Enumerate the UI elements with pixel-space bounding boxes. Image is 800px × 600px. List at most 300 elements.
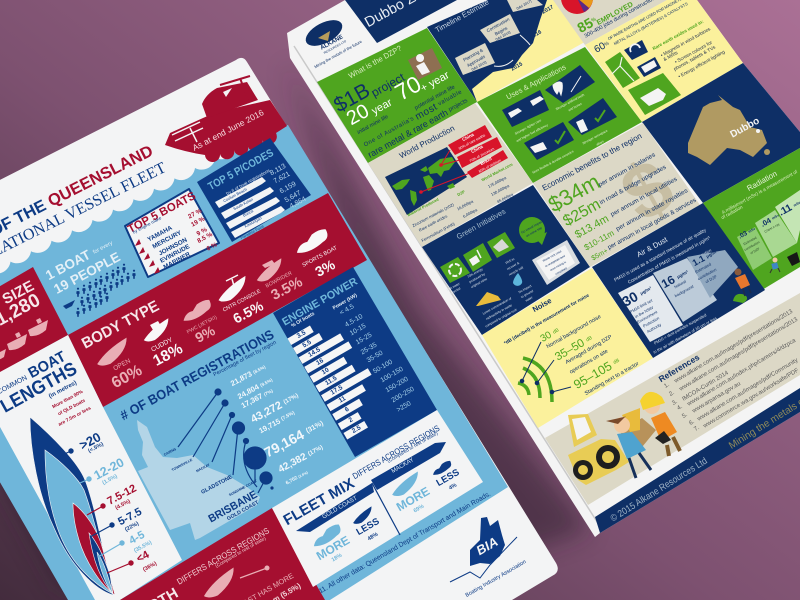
panel: green initiatives: Green Initiatives: [455, 207, 507, 241]
panel: top 5 postcodes: 5,647: [284, 190, 302, 204]
icon: motor cruiser: As at end June 2016: [191, 107, 266, 153]
panel: noise: *dB (decibel) is the measurement for noise: [503, 292, 591, 346]
logo: alkane: [302, 15, 363, 69]
panel: timeline estimate: 2016: [529, 29, 543, 41]
panel: air and dust: 16 μg/m³: [659, 265, 691, 291]
panel: air and dust: PM10 is used as a standard measure of air quality: [613, 227, 707, 282]
panel: air and dust: [592, 203, 765, 358]
panel: mining references: 7.: [693, 425, 701, 433]
panel: green initiatives: 70% water: [445, 281, 461, 292]
map city labels: GLADSTONE: [200, 474, 234, 496]
panel: top 5 boats: YAMAHA: [146, 224, 174, 243]
panel: common boat lengths: are 7.5m or less: [57, 405, 92, 428]
logo: boating industry association: [450, 517, 527, 599]
panel: length differs across regions: [120, 508, 325, 600]
chart: power ranges: 15-25: [355, 332, 373, 346]
panel: top 5 boats: JOHNSON: [158, 236, 189, 257]
table: production: DZP: [456, 189, 466, 197]
panel: fleet mix: LESS: [355, 516, 381, 538]
illustration: loader and miners: [568, 392, 680, 485]
panel: body type: 3.5%: [269, 274, 305, 304]
chart: bar values: 17.5: [330, 384, 344, 397]
chart labels: length categories: (22%): [124, 521, 140, 533]
panel: mining references: 5.: [681, 412, 689, 420]
panel: employment pie: EMPLOYED: [595, 0, 634, 27]
chart: bar values: 11.5: [324, 375, 339, 387]
panel: air and dust: PM10 limit set: [629, 297, 654, 314]
panel: top 5 boats: EVINRUDE: [159, 243, 191, 265]
panel: timeline estimate: Planning &: [462, 48, 484, 62]
panel: green initiatives: completed: [554, 266, 568, 276]
panel: employment pie: 85%: [574, 12, 600, 36]
table: production: Material Produced: [407, 196, 440, 217]
logo: alkane: ALKANE: [320, 34, 344, 52]
map connectors: [178, 389, 273, 493]
panel: top 5 postcodes: [197, 138, 311, 242]
world production callouts: [419, 125, 508, 194]
table: production: Zirconium materials (zr02): [411, 202, 455, 228]
panel: radiation: Estimated: [743, 236, 758, 246]
panel: common boat lengths: BOAT: [25, 348, 69, 382]
chart: bar values: 11: [338, 395, 347, 405]
table: production: Rare earth oxides: [418, 213, 448, 233]
panel: air and dust: contribution: [697, 267, 717, 281]
panel: green initiatives: to ground: [520, 289, 534, 299]
map city labels: TOWNSVILLE: [171, 458, 194, 472]
chart labels: length categories: (1.5%): [101, 473, 119, 486]
panel: radiation: Chest x-ray: [764, 222, 781, 234]
panel: body type: CNTR CONSOLE: [222, 288, 262, 314]
panel: noise: 30 dB: [539, 325, 562, 345]
panel: air and dust: PM10 = dust particles suspended: [653, 312, 707, 346]
panel: top 5 postcodes: South Kolan: [232, 197, 254, 211]
chart: bar values: [296, 329, 363, 435]
panel: fleet mix: 69%: [413, 504, 425, 514]
panel: rare earths uses: [585, 0, 743, 122]
world production callouts: 85% of niobium: [478, 158, 502, 174]
chart: power ranges: >250: [396, 400, 413, 414]
panel: body type: 9%: [192, 322, 218, 346]
panel: body type: [68, 193, 367, 407]
panel: rare earths uses: • Energy efficient lighting: [677, 49, 726, 80]
map city labels: SUNSHINE COAST: [228, 478, 259, 497]
panel: mining references: www.alkane.com.au/images/pdf/presentations/2013: [673, 308, 795, 385]
chart labels: length categories: 12-20: [92, 455, 126, 483]
panel: radiation: A millisievert (mSv) is a measurement of: [721, 169, 799, 216]
panel: fleet mix: DIFFERS ACROSS REGIONS: [351, 423, 442, 481]
table: production: 16,000tpa: [456, 198, 475, 211]
panel: what is the dzp: $1B: [330, 79, 374, 117]
panel: fleet mix: LESS: [435, 467, 461, 489]
panel: noise: 35–50 dB: [553, 332, 595, 364]
world production callouts: 70% of zirconium: [469, 147, 495, 163]
panel: green initiatives: on mine site: [525, 226, 543, 238]
panel: mining references: www.alkane.com.au/index.php/careers/4/dzpca: [686, 338, 798, 408]
panel: mining references: 6.: [688, 419, 696, 427]
panel: length differs across regions: (Compared to rest of state): [214, 535, 267, 569]
panel: green initiatives: original mine: [470, 277, 488, 289]
chart labels: length categories: (35.5%): [133, 540, 153, 554]
panel: economic benefits: per annum in local goods & services: [607, 197, 697, 251]
panel: body type: 18%: [150, 340, 186, 370]
world production callouts: China: [461, 132, 475, 142]
footer band: © 2015 Alkane Resources Ltd: [609, 456, 709, 524]
panel: rare earths uses: • Magnets in wind turbines: [660, 26, 712, 59]
table: production: 175,000tpa: [487, 175, 508, 189]
chart: power ranges: 25-35: [360, 342, 378, 356]
chart: bar values: 6: [344, 406, 351, 414]
chart: engine power bars: [287, 325, 372, 439]
world production callouts: Brazil: [479, 156, 493, 166]
shadows: [0, 60, 590, 590]
table: production: 130,000tpa: [490, 183, 511, 197]
panel: top 5 postcodes: Bucca: [242, 208, 255, 218]
panel: fleet mix: [272, 410, 483, 587]
panel: radiation: contribution: [744, 240, 761, 252]
heading: one boat per people: 19 PEOPLE: [51, 249, 123, 297]
chart: bar values: 2.5: [351, 424, 363, 435]
panel: green initiatives: 70% energy: [467, 267, 484, 279]
table: production: 6,000tpa: [462, 207, 479, 219]
panel: green initiatives: No visual impact: [520, 219, 544, 235]
panel: air and dust: Concentration of PM10 is measured in μg/m³: [627, 235, 711, 285]
panel: green initiatives: compared to original rock: [484, 307, 518, 328]
region registration figures: 6,702 (2.6%): [285, 470, 309, 486]
panel: what is the dzp: 70: [391, 70, 425, 106]
chart: bar values: 5.5: [301, 339, 313, 349]
panel: top 5 boats: 8.5 %: [196, 231, 214, 245]
panel: green initiatives: produced by: [468, 272, 486, 284]
panel: noise: Averaged during DZP: [565, 334, 614, 366]
panel: world production: World Production: [398, 124, 456, 160]
table: production: [407, 161, 515, 243]
panel: world production: [368, 103, 533, 247]
panel: green initiatives: No impact: [518, 284, 532, 294]
map: world: [385, 147, 467, 215]
chart: power ranges: 150-200: [384, 376, 410, 394]
panel: green initiatives: to revegetate land: [544, 254, 566, 268]
chart: power ranges: [339, 303, 416, 414]
panel: green initiatives: [422, 185, 590, 335]
panel: rare earths uses: & MRIs: [662, 50, 680, 63]
panel: engine power: [273, 267, 437, 457]
panel: mining references: www.alkane.com.au/images/pdf/Community: [696, 357, 799, 423]
panel: economic benefits: $25m: [560, 196, 604, 230]
panel: noise: Noise: [531, 296, 553, 314]
panel: economic benefits: in road & bridge upgrades: [599, 164, 667, 206]
panel: noise: Standing next to a tractor: [584, 361, 640, 397]
panel: fleet mix: MORE: [314, 533, 352, 563]
world production callouts: China: [470, 144, 484, 154]
panel: mining references: www.alkane.com.au/images/pdf/presentations/2013: [678, 316, 800, 393]
panel: rare earths uses: 60%: [593, 38, 612, 56]
panel: mining references: www.arpansa.gov.au: [691, 381, 742, 415]
panel: top 5 boats: MERCURY: [151, 229, 183, 251]
panel: economic benefits: $34m: [544, 169, 604, 217]
panel: top 5 boats: TOP 5 BOATS: [126, 190, 198, 236]
icon: motor cruiser: [165, 76, 287, 162]
panel: mining references: 3.: [671, 399, 679, 407]
chart: nested sail shapes: [30, 417, 115, 595]
panel: air and dust: Natural: [673, 279, 687, 289]
heading: one boat per people: 1 BOAT: [43, 247, 94, 283]
panel: green initiatives: once mining is: [549, 260, 567, 272]
panel: mining references: 1.: [663, 382, 671, 390]
panel: radiation: .03 mSv: [737, 225, 757, 240]
chart: bar values: 3.5: [296, 329, 307, 340]
panel: rare earths uses: METAL ALLOYS (BATTERIES) & CATALYSTS: [613, 1, 689, 46]
panel: green initiatives: recycled: [449, 286, 461, 296]
panel: mining references: References: [657, 352, 701, 384]
left page: queensland recreational vessel fleet: [0, 58, 558, 600]
panel: top 5 postcodes: Coolum Beach: [222, 187, 248, 203]
chart: power ranges: 200-250: [390, 386, 416, 404]
panel: top 5 postcodes: 7,621: [273, 171, 291, 185]
logo: boating industry association: Boating Industry Association: [465, 559, 527, 599]
panel: rare earths uses: Rare earth oxides used in:: [652, 19, 705, 51]
chart labels: length categories: [77, 429, 158, 573]
panel: top 5 boats: 6 %: [206, 241, 219, 253]
panel: uses and applications: and higher fuel efficiency: [516, 123, 549, 143]
panel: engine power: ENGINE POWER: [280, 276, 360, 328]
panel: timeline estimate: [427, 0, 667, 102]
panel: dubbo location map: [642, 63, 800, 203]
panel: what is the dzp: potential mine life: [414, 84, 456, 112]
panel: what is the dzp: rare metal & rare earth projects: [366, 96, 470, 160]
map: queensland: [137, 420, 260, 540]
panel: radiation: Radiation: [745, 169, 779, 193]
panel: number of boat registrations: Percentage of fleet by region: [213, 340, 277, 378]
region registration figures: 19,715 (7.5%): [257, 409, 297, 435]
panel: economic benefits: $5m+: [591, 248, 609, 262]
panel: body type: BOWRIDER: [265, 270, 293, 289]
panel: mining references: www.commerce.wa.gov.au/worksafe/PDF: [702, 367, 800, 430]
panel: green initiatives: recycle salt: [508, 265, 524, 277]
region registration figures: 24,804 (9.5%): [236, 375, 274, 401]
panel: green initiatives: radioactivity in waste: [485, 303, 513, 321]
logo: alkane: RESOURCES LTD: [323, 39, 348, 55]
panel: top 5 postcodes: 4,864: [289, 196, 307, 210]
panel: uses and applications: alloys: [595, 139, 605, 147]
page sheet: [0, 58, 558, 600]
panel: engine power: % Of boats: [290, 311, 316, 329]
title banner: [345, 0, 457, 43]
panel: air and dust: Environment: [636, 309, 659, 325]
panel: what is the dzp: year: [370, 96, 395, 117]
chart: bar values: 14.5: [307, 346, 322, 359]
chart connectors: [60, 451, 131, 573]
panel: green initiatives: water: [525, 295, 534, 303]
panel: number of boat registrations: # OF BOAT REGISTRATIONS: [118, 327, 276, 423]
chart labels: length categories: (<.5%): [87, 441, 105, 454]
panel: body type: OPEN: [112, 357, 132, 372]
table: production: World Market.com: [481, 161, 514, 182]
panel: uses and applications: Uses & Applications: [505, 62, 568, 102]
panel: air and dust: 1.1 μg/m³: [691, 246, 720, 268]
panel: number of boat registrations: [118, 327, 327, 540]
table: production: 95,000tpa: [496, 191, 515, 204]
panel: body type: SPORTS BOAT: [302, 245, 339, 269]
panel: economic benefits: per annum in state royalties: [615, 187, 689, 233]
panel: air and dust: 30 μg/m³: [619, 280, 655, 310]
panel: common boat lengths: (in metres): [48, 380, 78, 400]
chart: power ranges: 35-50: [366, 350, 384, 364]
panel: top 5 postcodes: by # of boat registrations: [225, 168, 271, 196]
chart labels: length categories: 4-5: [127, 529, 147, 547]
panel: timeline estimate: (Mid 2015): [471, 60, 487, 72]
panel: mining references: 2.: [668, 390, 676, 398]
icon: sound waves: [518, 358, 552, 402]
chart: power ranges: 4.5-10: [344, 313, 364, 329]
panel: air and dust: in the air with diameters of 10 μm or less: [652, 315, 718, 355]
panel: uses and applications: [477, 47, 642, 183]
panel: body type: 60%: [109, 362, 145, 392]
panel: top 5 boats: 9 %: [196, 226, 209, 238]
heading: one boat per people: for every: [92, 240, 114, 256]
panel: noise: operations on site: [569, 349, 609, 375]
region registration figures: 21,873 (8.5%): [229, 362, 267, 388]
scalloped light blue background: [0, 125, 508, 600]
panel: mining references: [545, 293, 800, 505]
panel: top 5 boats: 27 %: [187, 207, 203, 220]
panel: body type: CUDDY: [150, 336, 174, 354]
panel: common boat lengths: More than 90%: [51, 389, 85, 410]
panel: top 5 boats: 19 %: [190, 215, 206, 228]
panel: economic benefits: [533, 123, 700, 267]
panel: green initiatives: Waste rock used: [542, 249, 562, 263]
chart labels: length categories: (4.5%): [114, 498, 132, 511]
region registration figures: 42,382 (17%): [277, 443, 325, 475]
panel: what is the dzp: One of Australia's most valuable: [362, 87, 465, 151]
panel: uses and applications: Stronger aerospace: [582, 129, 608, 145]
panel: fleet mix: GOLD COAST: [321, 495, 359, 520]
panel: air and dust: Protection: [642, 315, 660, 329]
panel: uses and applications: Stronger artificial teeth: [555, 93, 585, 111]
panel: what is the dzp: + year: [419, 69, 452, 95]
panel: body type: PWC (JETSKI): [186, 314, 218, 335]
panel: what is the dzp: [317, 28, 477, 163]
panel: noise: [482, 268, 653, 428]
chart: power ranges: 100-150: [379, 366, 405, 384]
panel: economic benefits: Economic benefits to the region: [541, 131, 643, 193]
panel: timeline estimate: Approvals: [466, 54, 487, 68]
panel: top 5 boats: by engine make: [132, 215, 163, 235]
panel: uses and applications: Stronger, lighter cars: [514, 118, 542, 136]
chart: bar values: 10: [321, 366, 331, 376]
panel: rare earths uses: phones, tablets & TVs: [673, 44, 717, 73]
panel: common boat lengths: [0, 335, 182, 600]
chart labels: length categories: 5-7.5: [116, 506, 144, 528]
panel: uses and applications: More flexible & durable ceramics: [532, 149, 575, 175]
panel: radiation: .04 mSv: [759, 211, 781, 229]
panel: fleet mix: MACKAY: [391, 457, 415, 475]
panel: top 5 boats: [125, 189, 219, 277]
panel: fleet mix: 48%: [367, 532, 379, 542]
footer band: [595, 371, 800, 533]
panel: dubbo location map: Dubbo: [728, 116, 762, 140]
chart: power ranges: < 4.5: [339, 303, 356, 317]
page sheet: [287, 0, 800, 537]
right page: dubbo zirconia project: [287, 0, 800, 537]
panel: air and dust: background: [674, 284, 694, 298]
panel: what is the dzp: initial mine life: [356, 114, 390, 136]
panel: radiation: [703, 148, 800, 290]
map city labels: GOLD COAST: [226, 499, 261, 522]
panel: employment pie: [553, 0, 667, 45]
panel: top 5 postcodes: TOP 5 P/CODES: [206, 147, 276, 193]
chart: power ranges: 10-15: [349, 323, 367, 337]
table: production: 3,000tpa: [467, 214, 484, 226]
logo: boating industry association: BIA: [474, 534, 500, 558]
panel: fleet mix: (Compared to rest of state): [386, 430, 439, 464]
map city labels: [163, 447, 261, 525]
panel: fleet mix: 18%: [331, 553, 343, 563]
panel: top 5 postcodes: 6,159: [279, 181, 297, 195]
panel: body type: 3%: [312, 256, 338, 280]
panel: air and dust: of DZP: [704, 274, 718, 284]
chart labels: length categories: <4: [135, 548, 152, 565]
panel: what is the dzp: What is the DZP?: [347, 44, 403, 80]
panel: top 5 postcodes: 8,113: [269, 163, 287, 177]
noise level pointers: [520, 342, 571, 394]
panel: economic benefits: $: [607, 141, 687, 239]
panel: economic benefits: $10-11m: [582, 228, 616, 252]
panel: air and dust: in the NSW: [634, 305, 654, 319]
chart labels: length categories: (36%): [142, 561, 158, 573]
chart: bar values: 16: [315, 357, 325, 367]
region registration figures: [229, 362, 327, 486]
panel: mining references: 4.: [676, 404, 684, 412]
panel: what is the dzp: 20: [343, 100, 373, 130]
panel: what is the dzp: project: [369, 70, 408, 100]
panel: fleet mix: MORE: [394, 484, 432, 514]
panel: noise: 95–105 dB: [571, 354, 623, 392]
panel: air and dust: *Annual average concentration: [662, 248, 712, 278]
chart: power ranges: 50-100: [372, 359, 394, 375]
panel: body type: BODY TYPE: [79, 298, 162, 353]
chart: bar values: 2: [348, 416, 355, 424]
panel: common boat lengths: of QLD boats: [57, 398, 87, 417]
panel: timeline estimate: Begins: [494, 25, 509, 37]
panel: radiation: of DZP: [750, 246, 761, 255]
chart labels: length categories: >20: [77, 429, 103, 453]
panel: economic benefits: per annum in salaries: [597, 151, 657, 189]
panel: engine power: Power (kW): [332, 292, 359, 311]
map city labels: MACKAY: [195, 462, 211, 473]
panel: fleet size: [0, 267, 68, 375]
chart labels: length categories: 7.5-12: [105, 482, 139, 508]
panel: length differs across regions: DIFFERS ACROSS REGIONS: [175, 525, 271, 587]
map city labels: CAIRNS: [163, 447, 177, 457]
panel: economic benefits: per annum in local utilities: [610, 176, 678, 218]
panel: air and dust: Authority: [646, 322, 662, 334]
panel: timeline estimate: 2017: [541, 4, 555, 16]
panel: green initiatives: recover &: [506, 261, 521, 271]
panel: radiation: of radiation: [720, 204, 744, 221]
panel: timeline estimate: (Mid 2016): [495, 30, 511, 42]
world production callouts: 90% of rare earths: [458, 133, 486, 151]
panel: rare earths uses: • Screen colours for: [674, 40, 714, 65]
panel: timeline estimate: 2015: [510, 61, 524, 73]
panel: timeline estimate: Construction: [486, 16, 511, 33]
panel: top 5 boats: MARINER: [162, 251, 192, 271]
panel: green initiatives: Lower concentration of: [482, 296, 512, 316]
panel: air and dust: Estimated: [694, 261, 712, 275]
panel: economic benefits: $13.4m: [573, 213, 611, 241]
panel: green initiatives: PAS to: [505, 257, 515, 265]
panel: fleet mix: 4%: [448, 482, 458, 492]
region registration figures: 17,367 (7%): [240, 386, 275, 410]
